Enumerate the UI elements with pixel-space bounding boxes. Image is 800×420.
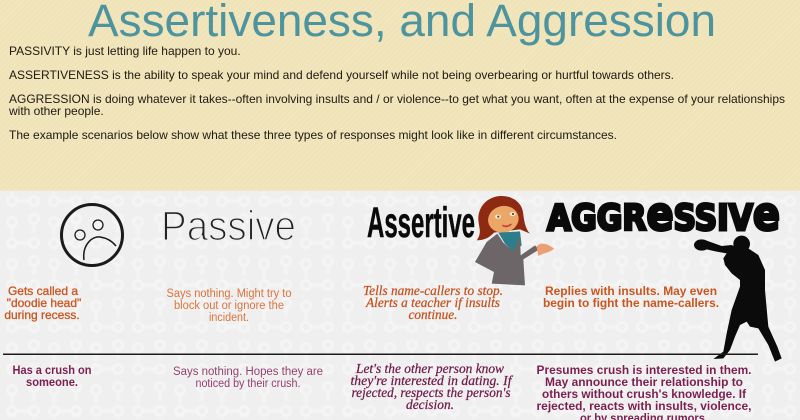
introduction text: with other people. — [8, 104, 104, 118]
passive row 2: situation: someone. — [26, 375, 78, 389]
assertive row 1: response: Alerts a teacher if insults — [365, 295, 500, 310]
top background panel — [0, 0, 800, 191]
aggressive row 2: response — [536, 363, 752, 420]
assertive row 2: response: Let's the other person know — [355, 361, 504, 376]
passive row 2: situation: Has a crush on — [12, 363, 92, 377]
introduction text: AGGRESSION is doing whatever it takes--often involving insults and / or violence--to get what you want, often at the expense of your relationships — [9, 92, 785, 106]
aggressive row 2: response: others without crush's knowledge. If — [542, 387, 747, 401]
aggressive row 1: response: begin to fight the name-callers. — [543, 296, 719, 310]
passive row 1: response: incident. — [209, 312, 249, 324]
aggressive row 2: response: Presumes crush is interested in them. — [536, 363, 752, 377]
heading: Aggressive: AGGReSSIVe — [547, 187, 780, 241]
introduction text — [8, 44, 785, 142]
passive row 1: response — [166, 288, 292, 324]
assertive row 2: response: decision. — [406, 397, 454, 412]
aggressive row 1: response: Replies with insults. May even — [545, 284, 717, 298]
passive row 2: response — [173, 366, 323, 390]
passive row 1: situation — [4, 284, 81, 322]
aggressive row 1: response — [543, 284, 719, 310]
passive row 1: situation: Gets called a — [8, 284, 78, 298]
passive row 1: situation: "doodie head" — [7, 296, 81, 310]
icon: boxer silhouette — [694, 236, 782, 362]
introduction text: ASSERTIVENESS is the ability to speak your mind and defend yourself while not being overbearing or hurtful towards others. — [9, 68, 674, 82]
passive row 1: response: block out or ignore the — [174, 300, 284, 312]
introduction text: The example scenarios below show what these three types of responses might look like in different circumstances. — [9, 128, 617, 142]
introduction text: PASSIVITY is just letting life happen to you. — [9, 44, 241, 58]
passive row 2: situation — [12, 363, 92, 389]
icon: sad face — [62, 204, 122, 266]
heading: Assertive: Assertive — [367, 199, 475, 247]
aggressive row 2: response: rejected, reacts with insults, violence, — [536, 399, 752, 413]
passive row 2: response: noticed by their crush. — [196, 378, 300, 390]
assertive row 2: response: rejected, respects the person's — [352, 385, 510, 400]
aggressive row 2: response: May announce their relationship to — [545, 375, 743, 389]
heading: Passive: Passive — [161, 202, 296, 249]
assertive row 2: response: they're interested in dating. If — [350, 373, 514, 388]
passive row 2: response: Says nothing. Hopes they are — [173, 366, 323, 378]
assertive row 1: response: continue. — [408, 307, 458, 322]
lower background panel — [0, 191, 800, 420]
divider line — [3, 354, 758, 355]
passive row 1: situation: during recess. — [4, 308, 80, 322]
icon: businesswoman — [475, 196, 554, 285]
assertive row 1: response — [363, 283, 503, 322]
passive row 1: response: Says nothing. Might try to — [166, 288, 292, 300]
assertive row 1: response: Tells name-callers to stop. — [363, 283, 503, 298]
assertive row 2: response — [350, 361, 514, 412]
